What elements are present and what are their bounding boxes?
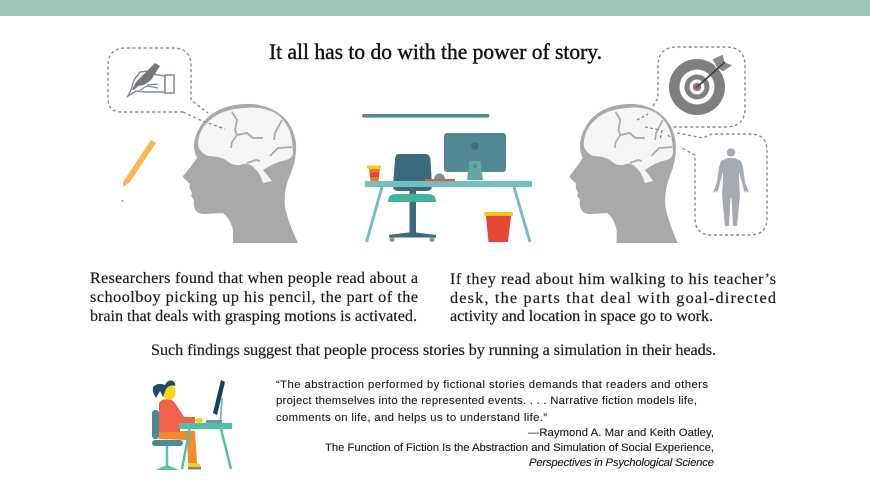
- icon: human figure: [713, 148, 749, 226]
- left paragraph: Researchers found that when people read about a: [90, 269, 418, 287]
- dashed thought bubble: [108, 48, 225, 129]
- monitor: [444, 133, 506, 180]
- top band: [0, 0, 870, 16]
- right paragraph: [450, 270, 776, 325]
- legs: [159, 431, 197, 463]
- left paragraph: [90, 269, 418, 325]
- hair: [153, 380, 175, 398]
- face: [162, 384, 176, 400]
- left paragraph: schoolboy picking up his pencil, the part of the: [90, 288, 418, 306]
- right paragraph: activity and location in space go to work.: [450, 307, 713, 325]
- target bubble: [653, 47, 745, 127]
- computer: [206, 380, 225, 423]
- shoe: [188, 463, 201, 470]
- attribution: Perspectives in Psychological Science: [529, 457, 714, 469]
- head silhouette: [183, 104, 298, 243]
- brain: [198, 108, 293, 183]
- desk: [179, 423, 232, 469]
- icon: target with arrow: [669, 54, 733, 115]
- title: It all has to do with the power of story.: [269, 39, 602, 64]
- mouse and pad: [425, 174, 455, 181]
- brain folds: [231, 112, 292, 163]
- quotation: “The abstraction performed by fictional stories demands that readers and others: [276, 379, 708, 391]
- summary sentence: Such findings suggest that people process stories by running a simulation in their heads.: [151, 341, 716, 359]
- desk top and legs: [365, 181, 532, 242]
- right paragraph: desk, the parts that deal with goal-directed: [450, 289, 776, 307]
- quotation: [276, 379, 708, 424]
- person at desk icon: [152, 380, 232, 470]
- right paragraph: If they read about him walking to his teacher’s: [450, 270, 776, 288]
- chair: [388, 154, 436, 242]
- coffee cup: [367, 166, 381, 181]
- body bubble: [677, 133, 767, 235]
- attribution: The Function of Fiction Is the Abstraction and Simulation of Social Experience,: [325, 442, 714, 454]
- quotation: comments on life, and helps us to understand life.”: [276, 412, 547, 424]
- head and brain: [570, 104, 678, 243]
- torso and arm: [159, 399, 195, 432]
- hand: [195, 418, 203, 423]
- shelf: [362, 114, 490, 118]
- right head illustration: [570, 47, 767, 243]
- attribution: —Raymond A. Mar and Keith Oatley,: [528, 427, 714, 439]
- quotation: project themselves into the represented events. . . . Narrative fiction models life,: [276, 395, 697, 407]
- left paragraph: brain that deals with grasping motions is activated.: [90, 307, 417, 325]
- pencil: [123, 140, 156, 187]
- icon: hand writing: [128, 63, 174, 96]
- dashed marks on brain: [637, 114, 675, 142]
- attribution: [325, 427, 714, 469]
- chair: [152, 410, 183, 470]
- left head illustration: [108, 48, 298, 243]
- pencil tip speck: [122, 200, 124, 202]
- wastebasket: [484, 212, 513, 242]
- desk illustration: [362, 114, 532, 242]
